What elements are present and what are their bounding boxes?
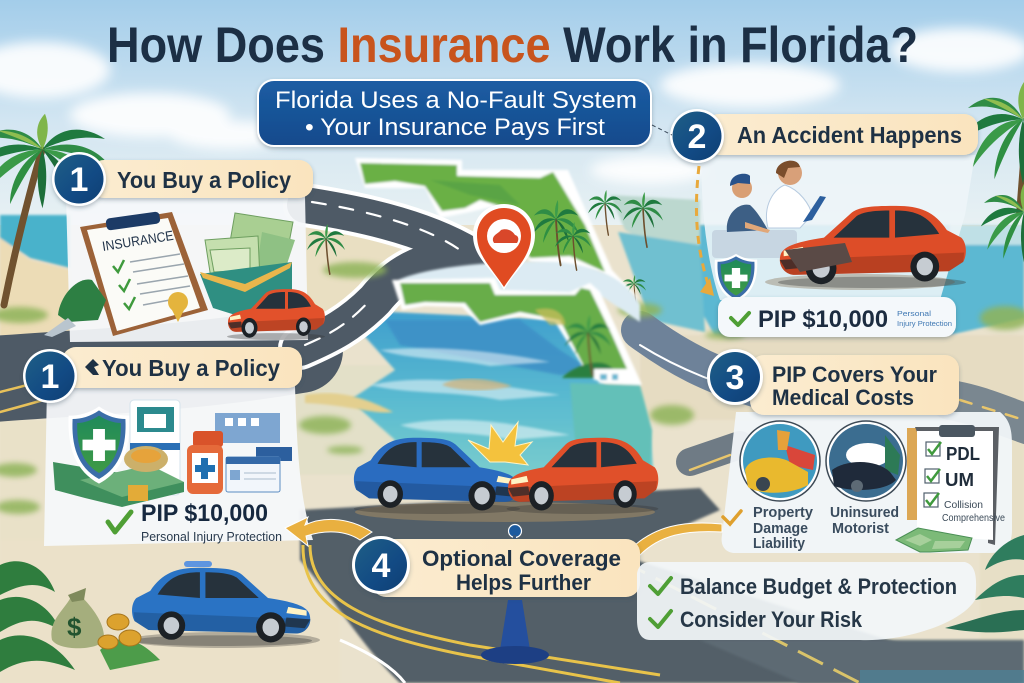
medicine bottle	[187, 431, 223, 494]
map: southern Florida	[392, 262, 652, 480]
coverage labels: Liability	[753, 536, 805, 552]
heading pill	[750, 355, 959, 415]
heading pill	[372, 539, 640, 597]
tip: balance budget: Balance Budget & Protection	[680, 574, 957, 599]
number badge: 3	[726, 359, 744, 397]
number badge: 4	[372, 547, 391, 585]
roads	[0, 202, 1024, 470]
PIP description: Personal Injury Protection	[141, 529, 282, 544]
number badge	[707, 349, 763, 405]
heading text: Medical Costs	[772, 385, 914, 410]
number badge	[23, 349, 77, 403]
check mark	[723, 511, 741, 524]
coverage labels	[753, 505, 899, 552]
insurance card	[226, 447, 292, 492]
heading text	[772, 362, 937, 410]
heading pill	[90, 160, 313, 198]
subtitle banner: Florida Uses a No-Fault System	[275, 87, 637, 114]
yellow arrow to step 3 panel	[635, 523, 722, 555]
money bag	[51, 588, 104, 648]
panel: step 2 an accident happens	[652, 109, 978, 337]
dashed connector	[652, 125, 672, 135]
shield	[715, 254, 757, 302]
heading text: You Buy a Policy	[102, 355, 280, 381]
clipboard: INSURANCE	[101, 228, 175, 254]
checklist clipboard: Collision	[944, 499, 983, 511]
yellow arrow to PIP panel	[285, 517, 372, 546]
number badge: 1	[41, 358, 59, 396]
heading text: Helps Further	[456, 570, 591, 595]
signpost	[481, 524, 549, 664]
check mark	[650, 611, 671, 627]
map: northern Florida	[355, 158, 640, 300]
dashed arrow	[696, 166, 714, 296]
panel: step 1 PIP coverage	[23, 347, 313, 546]
uninsured motorist circle	[826, 421, 906, 501]
number badge	[352, 536, 410, 594]
checklist clipboard: Comprehensive	[942, 513, 1005, 524]
heading text: An Accident Happens	[737, 122, 962, 148]
checklist clipboard: UM	[945, 470, 974, 490]
PIP pill: Injury Protection	[897, 319, 952, 328]
crashed red car	[765, 206, 966, 290]
heading pill	[705, 114, 978, 155]
heading text	[422, 546, 621, 595]
panel: step 1 you buy a policy	[44, 152, 325, 342]
shield	[68, 406, 130, 484]
central gulf water	[350, 312, 655, 500]
cash notes	[896, 528, 972, 552]
step 4 optional coverage	[352, 536, 640, 597]
palm trees	[0, 80, 1024, 305]
check mark	[108, 512, 131, 532]
heading pill	[62, 347, 302, 388]
seated patient and doctor	[712, 161, 826, 258]
PIP amount: PIP $10,000	[758, 306, 888, 333]
hospital building	[130, 400, 280, 495]
property damage circle	[740, 421, 820, 501]
check mark	[731, 313, 749, 325]
heading text: Optional Coverage	[422, 546, 621, 571]
car key fob	[44, 279, 106, 337]
location pin	[473, 204, 535, 290]
subtitle banner: • Your Insurance Pays First	[305, 114, 605, 141]
subtitle banner	[258, 80, 651, 146]
panel: step 3 PIP covers medical costs	[707, 349, 1012, 553]
money bag: $	[67, 612, 82, 642]
tip: consider risk: Consider Your Risk	[680, 607, 863, 632]
PIP pill	[718, 297, 956, 337]
gold coins	[98, 614, 141, 649]
red car	[227, 289, 325, 340]
coverage labels: Damage	[753, 521, 808, 537]
clipboard	[80, 211, 208, 336]
coverage labels: Property	[753, 505, 813, 521]
right foliage	[945, 535, 1024, 632]
collision scene: two cars	[354, 422, 658, 522]
tips panel	[637, 562, 976, 640]
palms on northern map	[533, 200, 591, 270]
back arrow mark	[85, 359, 99, 375]
bottom highway	[300, 488, 1024, 683]
number badge: 2	[688, 118, 706, 156]
bottom left plants and money bag	[0, 561, 160, 672]
impact starburst	[468, 422, 532, 465]
checklist clipboard: PDL	[946, 444, 980, 464]
police car	[130, 561, 320, 648]
cash stack	[53, 446, 184, 507]
checklist clipboard	[907, 425, 1005, 545]
coverage labels: Uninsured	[830, 505, 899, 521]
left and right ocean	[0, 195, 1024, 683]
title: How Does Insurance Work in Florida?	[107, 17, 918, 73]
check mark	[650, 578, 671, 594]
heading text: You Buy a Policy	[117, 167, 291, 193]
PIP amount: PIP $10,000	[141, 500, 268, 527]
PIP description: Personal	[897, 309, 931, 318]
greenery	[0, 262, 1024, 514]
number badge	[52, 152, 106, 206]
coverage labels: Motorist	[832, 521, 889, 537]
number badge	[670, 109, 724, 163]
number badge: 1	[70, 161, 88, 199]
heading text: PIP Covers Your	[772, 362, 937, 387]
box of cash	[200, 213, 295, 318]
